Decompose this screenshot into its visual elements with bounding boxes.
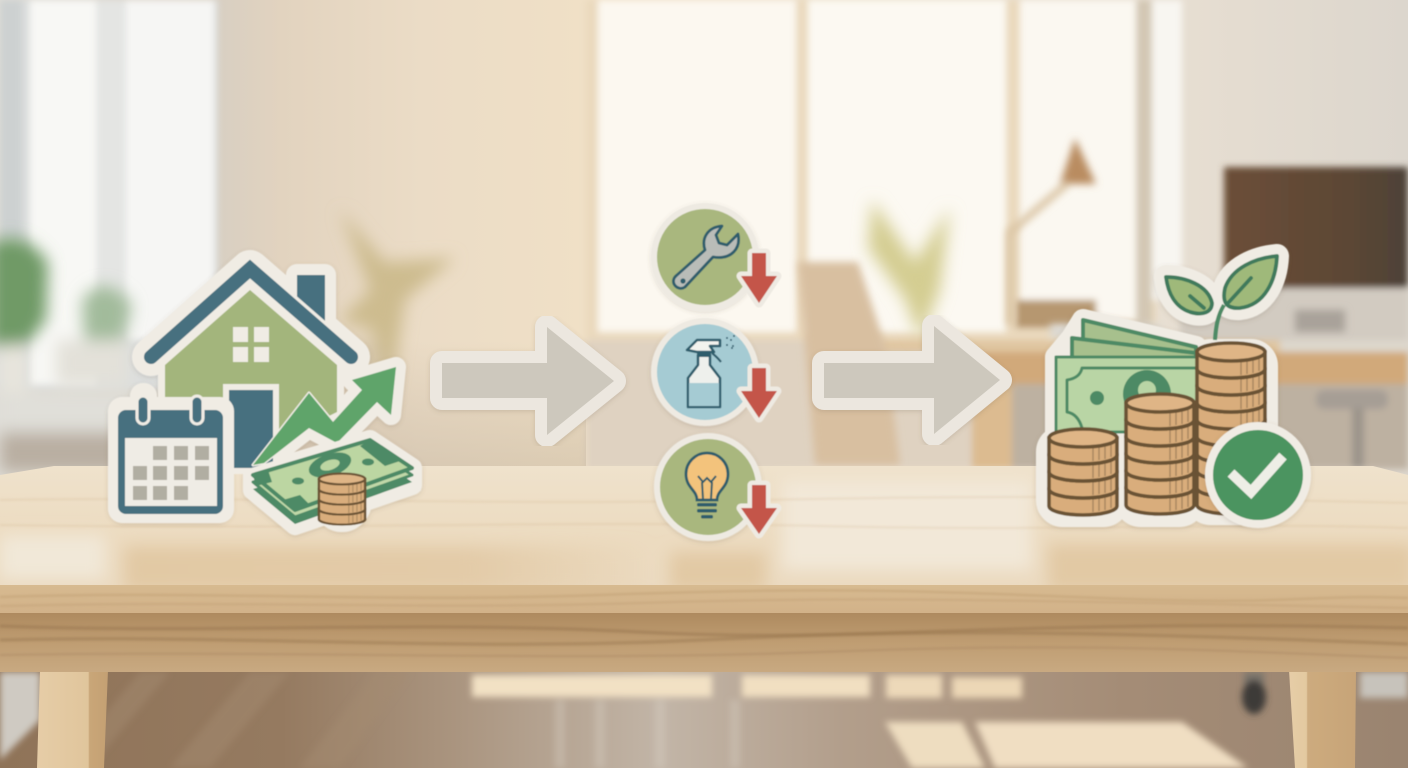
right shelf desk [880, 288, 1408, 469]
bottle [688, 355, 720, 407]
sticker backing [118, 269, 412, 530]
blurred room background [0, 0, 1408, 480]
plants [0, 238, 48, 352]
cash stack [245, 432, 420, 532]
coin stack right [1197, 343, 1265, 514]
door [226, 387, 276, 471]
house body [165, 290, 337, 467]
spray droplets [726, 335, 735, 349]
table legs [37, 670, 1356, 768]
roof [151, 269, 351, 357]
arrow: first step [442, 327, 614, 435]
wall shade [218, 340, 586, 470]
check badge [1209, 426, 1307, 524]
icon group: savings with plant, cash, coins and check [1049, 256, 1307, 524]
arrow: second step [824, 326, 1000, 434]
down arrow [741, 253, 777, 303]
roof band [153, 270, 351, 358]
coin stack middle [1126, 394, 1194, 514]
window [233, 327, 269, 362]
center window [586, 0, 1182, 345]
icon: wrench cost down [654, 206, 777, 308]
lamp [1060, 138, 1096, 184]
coin stack small [319, 474, 365, 525]
spray head [687, 340, 720, 352]
rising arrow [253, 367, 396, 465]
icon: spray bottle cost down [654, 321, 777, 423]
wrench [673, 226, 739, 288]
chair [798, 262, 900, 465]
leaves and stem [1166, 256, 1277, 340]
icon: light bulb cost down [657, 436, 777, 538]
cash bills [1056, 320, 1197, 432]
floor [0, 660, 1408, 768]
calendar [108, 396, 234, 523]
wooden table [0, 466, 1408, 672]
lower wall under center window [586, 340, 1226, 470]
left window [0, 0, 218, 390]
right monitor [1224, 167, 1408, 288]
down arrow [741, 368, 777, 418]
down arrow [741, 485, 777, 534]
sticker backing [1049, 256, 1277, 514]
coin stack left [1049, 429, 1117, 515]
bulb [686, 453, 728, 500]
chimney [297, 275, 325, 325]
icon group: house, calendar, rising arrow, cash [108, 269, 420, 532]
